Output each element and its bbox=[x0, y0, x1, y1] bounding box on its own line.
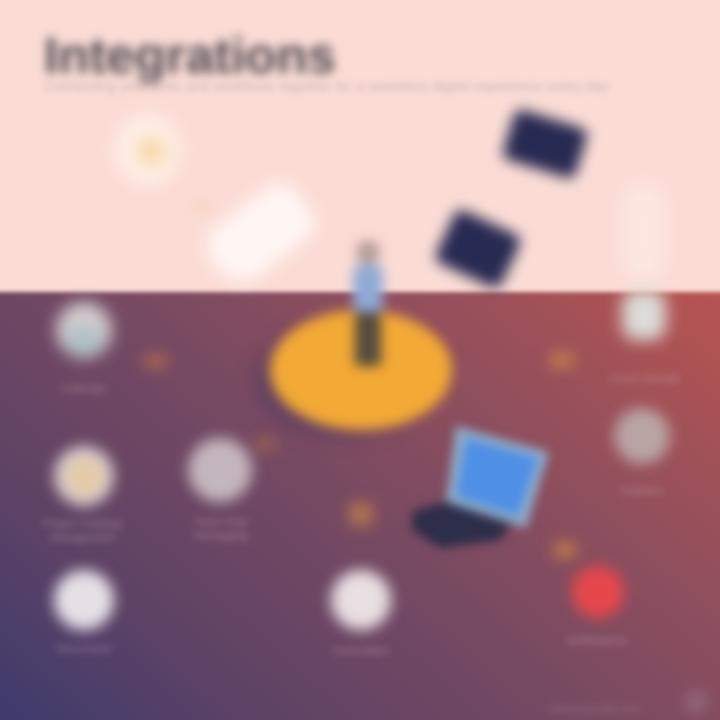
central orange disc bbox=[252, 303, 460, 440]
icon: laptop bbox=[406, 421, 554, 554]
subtitle: Connecting your tools and workflows together for a seamless digital experience every day bbox=[44, 78, 608, 94]
title: Integrations bbox=[44, 27, 336, 84]
panel: top background bbox=[0, 0, 720, 292]
icon: middle-left peach node bbox=[44, 436, 124, 516]
label: top-left node: Calendar bbox=[62, 383, 106, 395]
icon: bottom-centre white node bbox=[331, 570, 391, 630]
footer text: www.example.com bbox=[549, 703, 641, 715]
icon: footer logo bbox=[684, 690, 708, 714]
label: bottom-centre node: Automation bbox=[333, 645, 389, 657]
label: right grey node: Analytics bbox=[620, 485, 664, 497]
icon: white capsule bbox=[198, 176, 322, 292]
icon: dark card upper bbox=[501, 108, 589, 180]
icon: bottom-left white node bbox=[54, 570, 114, 630]
icon: red node bbox=[572, 566, 624, 618]
panel: bottom gradient background bbox=[0, 292, 720, 720]
label: red node: Notifications bbox=[567, 635, 627, 647]
icon: top-right node bbox=[622, 290, 666, 340]
icon: right grey node bbox=[614, 408, 670, 464]
icon: sun circle bbox=[114, 115, 181, 185]
label: middle grey node: Team Chat Messaging bbox=[194, 516, 248, 542]
connector dash centre-left bbox=[254, 438, 276, 452]
icon: middle grey node bbox=[188, 438, 252, 502]
connector dash left bbox=[144, 354, 168, 368]
person figure bbox=[344, 234, 392, 376]
connector dash right bbox=[550, 352, 574, 368]
icon: top-left node bbox=[46, 293, 122, 368]
icon: dark card lower bbox=[433, 208, 523, 290]
icon: pale tower bbox=[622, 182, 666, 282]
label: top-right node: Cloud Storage bbox=[610, 373, 680, 385]
icon: small dash bbox=[192, 202, 210, 210]
label: bottom-left node: Documents bbox=[56, 643, 112, 655]
label: middle-left node: Project Tracking Management bbox=[43, 518, 121, 544]
connector dash centre bbox=[349, 502, 373, 526]
connector dash lower right bbox=[554, 542, 576, 558]
